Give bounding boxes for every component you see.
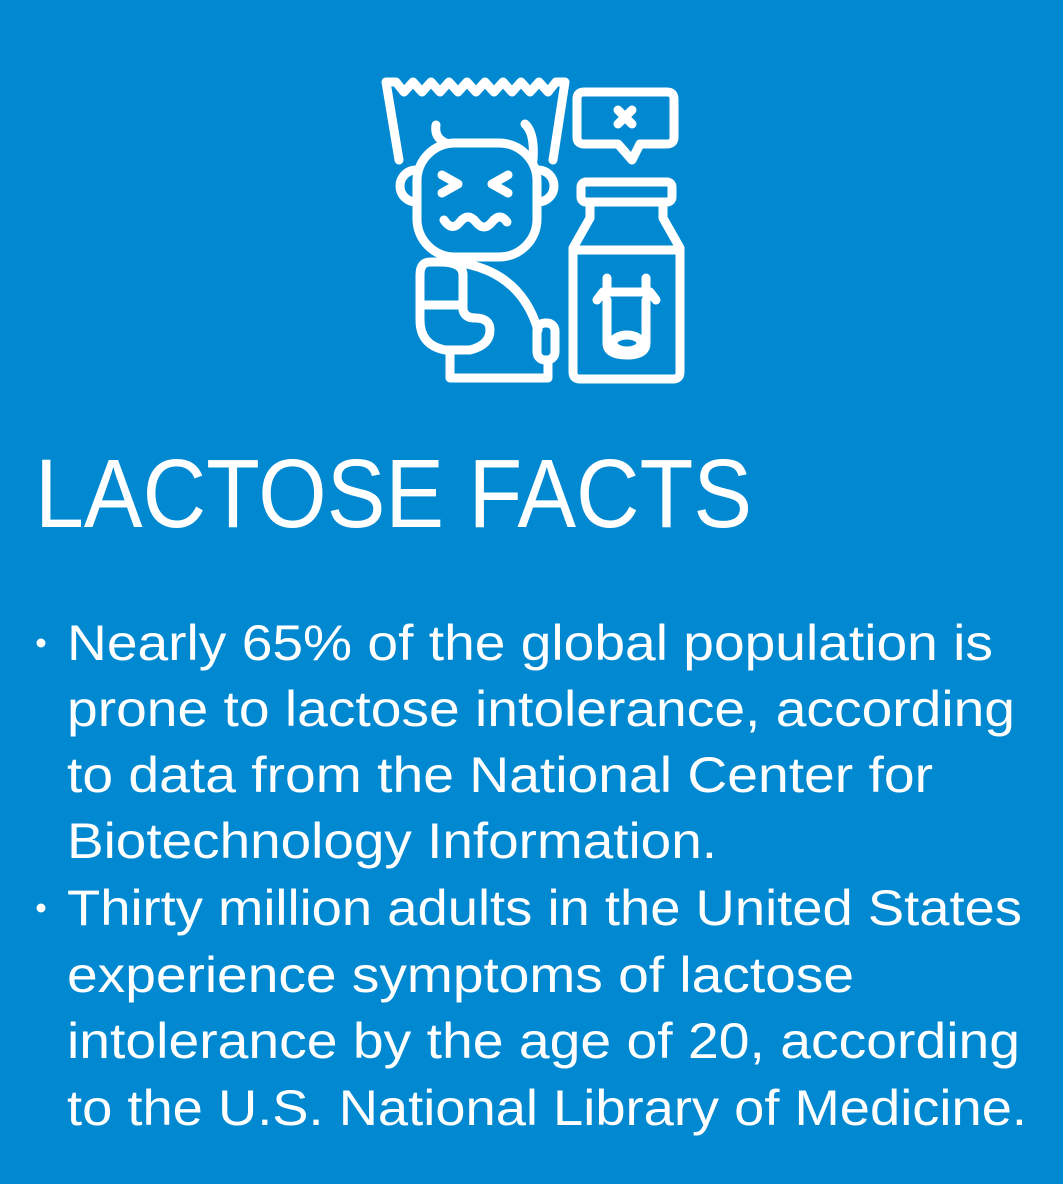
bullet 1: prone to lactose intolerance, according — [67, 681, 1015, 737]
icon: zigzag frame — [386, 82, 565, 160]
icon: face — [400, 124, 554, 257]
bullet 1: Nearly 65% of the global population is — [67, 615, 993, 671]
bullet 1: Biotechnology Information. — [67, 813, 717, 869]
icon: body — [420, 262, 555, 378]
bullet 1 — [36, 615, 1015, 869]
bullet 2: Thirty million adults in the United States — [67, 880, 1022, 936]
icon: speech bubble — [577, 92, 674, 160]
bullet 1: to data from the National Center for — [67, 747, 933, 803]
bullet 2: to the U.S. National Library of Medicine. — [67, 1080, 1027, 1136]
bullet 2 — [36, 880, 1027, 1136]
bullet 2: experience symptoms of lactose — [67, 947, 854, 1003]
title: LACTOSE FACTS — [35, 439, 752, 548]
icon: lactose intolerant person with milk bottle — [386, 82, 680, 379]
text block: facts list — [36, 615, 1027, 1136]
bullet 2: intolerance by the age of 20, according — [67, 1013, 1020, 1069]
icon: milk bottle — [573, 182, 680, 379]
